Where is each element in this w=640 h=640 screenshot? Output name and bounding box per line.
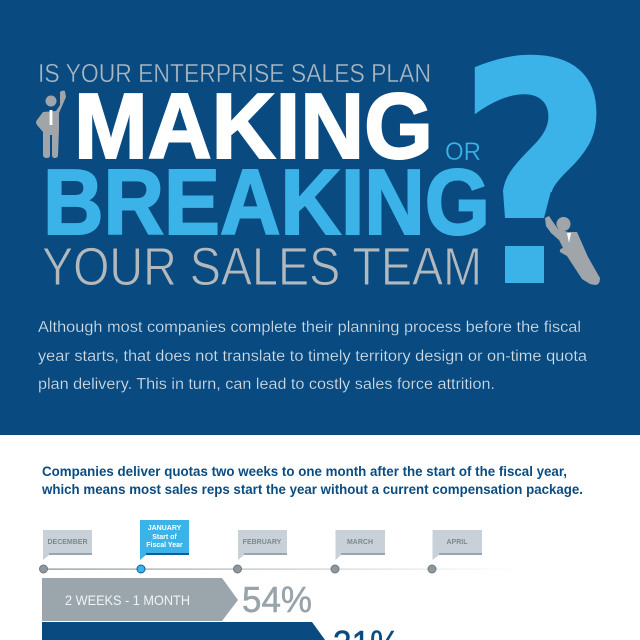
intro text block: Although most companies complete their planning process before the fiscal <box>38 319 581 336</box>
panel: navy header <box>0 0 640 435</box>
timeline marker: january <box>137 520 189 573</box>
title word: breaking: BREAKING <box>43 150 490 254</box>
timeline marker: march <box>331 530 385 573</box>
bar: dark blue 31% <box>42 622 400 640</box>
timeline marker: february <box>234 530 287 573</box>
bar: 2 weeks to 1 month 54% <box>42 578 312 621</box>
timeline marker: january: JANUARY <box>148 525 182 532</box>
large question mark: ? <box>456 0 614 356</box>
timeline marker: february: FEBRUARY <box>243 539 282 546</box>
section heading: Companies deliver quotas two weeks to one month after the start of the fiscal year, <box>42 464 567 479</box>
timeline marker: january: Fiscal Year <box>146 542 183 549</box>
timeline marker: march: MARCH <box>347 539 373 546</box>
intro text block: plan delivery. This in turn, can lead to costly sales force attrition. <box>38 376 495 393</box>
intro text block: year starts, that does not translate to timely territory design or on-time quota <box>38 348 587 365</box>
timeline marker: january: Start of <box>152 534 177 541</box>
title word: making: MAKING <box>74 74 433 178</box>
title word: or: OR <box>445 138 481 166</box>
section heading <box>41 464 583 497</box>
panel: white timeline section <box>0 435 640 640</box>
icon: businessman leaning on question mark <box>545 216 600 285</box>
timeline <box>40 520 523 573</box>
bar: 2 weeks to 1 month 54%: 2 WEEKS - 1 MONTH <box>65 592 190 608</box>
timeline marker: april: APRIL <box>446 539 468 546</box>
section heading: which means most sales reps start the year without a current compensation package. <box>41 482 583 497</box>
icon: businessman waving <box>36 91 66 158</box>
timeline marker: december: DECEMBER <box>47 539 88 546</box>
title line: is your enterprise sales plan: IS YOUR ENTERPRISE SALES PLAN <box>38 58 431 88</box>
intro text block <box>38 319 587 393</box>
timeline marker: december <box>40 530 92 573</box>
timeline marker: april <box>428 530 482 573</box>
title line: your sales team: YOUR SALES TEAM <box>42 237 482 297</box>
bar: 2 weeks to 1 month 54%: 54% <box>242 579 312 620</box>
large question mark <box>474 54 596 283</box>
